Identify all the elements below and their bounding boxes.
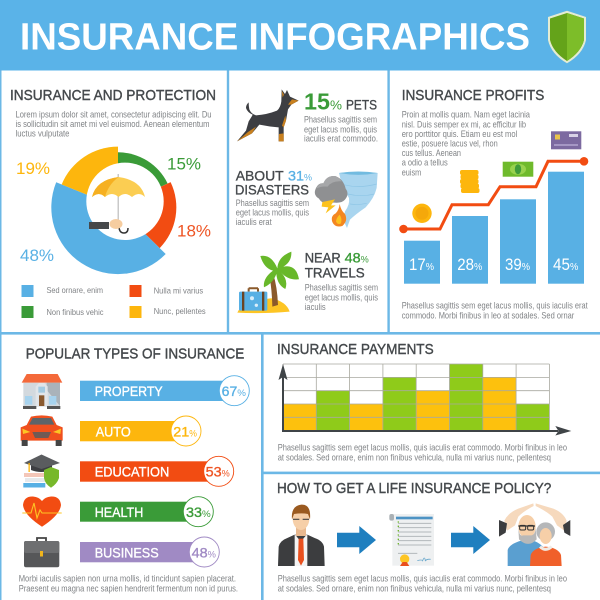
panel: insurance profits [399, 87, 588, 321]
icon: umbrella in hand [89, 174, 145, 233]
bar: health [80, 497, 213, 527]
footer text: Morbi iaculis sapien non urna mollis, id tincidunt sapien placerat. [19, 574, 236, 585]
icon: policy document [389, 514, 434, 566]
bar: auto: AUTO [96, 423, 131, 439]
pets stat: Phasellus sagittis sem [304, 114, 377, 125]
travels stat: TRAVELS [305, 265, 365, 281]
bar: education: 53 [206, 464, 222, 480]
caption [278, 443, 567, 464]
disasters stat: ABOUT [236, 168, 284, 184]
disasters stat: iaculis erat [236, 217, 272, 228]
bar: business: BUSINESS [95, 544, 159, 560]
bar: health: 33 [186, 504, 202, 520]
intro text: nisl. Duis semper ex mi, ac efficitur lib [402, 119, 526, 130]
disasters stat [235, 168, 313, 228]
bar: education: EDUCATION [95, 464, 169, 480]
icon: dog [237, 89, 299, 141]
bar chart: % [426, 262, 434, 273]
icon: car [21, 415, 63, 446]
intro text: luctus vulputate [16, 128, 70, 140]
icon: heart [22, 496, 62, 527]
travels stat: Phasellus sagittis sem [305, 283, 378, 294]
footer text [402, 300, 588, 321]
title: INSURANCE INFOGRAPHICS [20, 16, 530, 58]
icon: shield [548, 11, 586, 63]
bar: property [80, 376, 249, 406]
pets stat: 15 [304, 88, 330, 114]
disasters stat: Phasellus sagittis sem [236, 198, 309, 209]
icon: house [22, 374, 62, 409]
intro text: Lorem ipsum dolor sit amet, consectetur adipiscing elit. Du [16, 110, 212, 121]
icon: palm island with suitcase [237, 252, 299, 313]
grid chart [278, 364, 571, 436]
intro text: a odio a tellus [402, 158, 448, 169]
travels stat [305, 249, 378, 313]
footer text: Praesent eu magna nec sapien hendrerit fermentum non id purus. [19, 584, 238, 595]
travels stat: NEAR [305, 249, 341, 265]
bar chart: % [522, 262, 530, 273]
bar: auto: 21 [173, 423, 190, 439]
disasters stat: 31 [288, 168, 304, 184]
bar chart: 39 [505, 256, 522, 274]
icon: elderly couple under protective hands [499, 503, 570, 566]
donut labels: 18% [177, 223, 211, 241]
bar chart: 45 [553, 256, 570, 274]
donut chart [51, 147, 176, 274]
arrow [337, 526, 376, 554]
caption [278, 574, 567, 595]
bar chart: % [474, 262, 482, 273]
donut labels [16, 155, 211, 265]
intro text [402, 110, 531, 178]
bar chart: 17 [409, 256, 426, 274]
arrow [451, 526, 490, 554]
bar chart: 28 [457, 256, 474, 274]
donut labels: 48% [20, 247, 54, 265]
bar: auto [80, 416, 201, 446]
intro text: estie, posuere lacus vel, rhon [402, 138, 498, 150]
travels stat: eget lacus mollis, quis [305, 293, 378, 304]
pets stat: eget lacus mollis, quis [304, 124, 377, 135]
bar: health: HEALTH [95, 504, 143, 520]
disasters stat: DISASTERS [235, 182, 309, 198]
legend: Non finibus vehic [46, 307, 104, 317]
intro text: euism [402, 167, 421, 178]
trend line [399, 157, 588, 233]
bar: health: % [202, 509, 211, 519]
pets stat [304, 88, 378, 145]
bar chart: % [570, 262, 578, 273]
bar: business: % [208, 549, 216, 559]
travels stat: 48 [345, 249, 361, 265]
icon: coin [412, 204, 432, 223]
bar: property: % [237, 388, 246, 398]
icon: graduation cap with books and shield [23, 454, 60, 488]
bar: education: % [222, 469, 230, 479]
donut labels: 15% [167, 155, 201, 173]
heading: INSURANCE PAYMENTS [277, 341, 434, 358]
heading: POPULAR TYPES OF INSURANCE [26, 345, 244, 362]
bar: property: PROPERTY [95, 383, 163, 399]
icon: credit card [551, 131, 581, 149]
footer text [19, 574, 238, 595]
axes [278, 364, 571, 436]
heading: INSURANCE AND PROTECTION [10, 87, 216, 104]
intro text [16, 110, 212, 140]
panel: pets disasters travels [235, 88, 378, 313]
bar: auto: % [189, 428, 197, 438]
pets stat: % [330, 97, 342, 112]
intro text: is sollicitudin sit amet mi vel euismod. Aenean elementum [16, 119, 210, 130]
icon: storm [315, 171, 378, 228]
disasters stat: eget lacus mollis, quis [236, 208, 309, 219]
heading: INSURANCE PROFITS [402, 87, 544, 104]
legend: Sed ornare, enim [46, 285, 103, 295]
legend [22, 285, 206, 318]
panel: popular types of insurance [19, 345, 249, 595]
icon: coin stack [460, 170, 480, 193]
heading: HOW TO GET A LIFE INSURANCE POLICY? [277, 480, 551, 497]
intro text: cus tellus. Aenean [402, 148, 461, 159]
disasters stat: % [304, 173, 313, 184]
travels stat: iaculis [305, 302, 326, 313]
bar: education [80, 456, 234, 486]
legend: Nulla mi varius [154, 286, 203, 296]
pets stat: iaculis erat commodo. [304, 134, 378, 145]
bar chart [404, 172, 584, 284]
bar: business [80, 537, 219, 567]
icon: businessman [278, 505, 325, 566]
intro text: Proin at mollis quam. Nam eget lacinia [402, 110, 531, 121]
donut labels: 19% [16, 160, 50, 178]
header banner [0, 0, 600, 70]
bar: business: 48 [192, 544, 208, 560]
legend: Nunc, pellentes [154, 306, 206, 316]
icon: banknote [503, 162, 533, 177]
panel: insurance and protection [10, 87, 216, 318]
icon: briefcase [24, 538, 59, 567]
travels stat: % [361, 254, 369, 265]
panel: how to get a life insurance policy [277, 480, 570, 595]
panel: insurance payments [277, 341, 571, 464]
bar: property: 67 [222, 383, 238, 399]
pets stat: PETS [346, 96, 377, 112]
intro text: ero porttitor quis. Etiam eu est mol [402, 129, 517, 140]
